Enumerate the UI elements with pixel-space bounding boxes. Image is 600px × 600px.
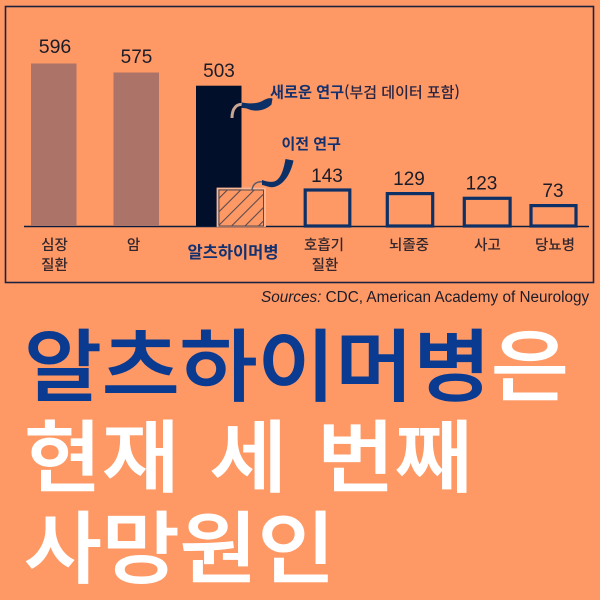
- bar: cancer: 575: [121, 47, 152, 68]
- bar: diabetes: [531, 181, 576, 226]
- category labels: 암: [127, 234, 140, 255]
- title line 3: 사망원인: [24, 486, 335, 600]
- category labels: 사고: [474, 234, 501, 255]
- bar: accidents: 123: [466, 174, 497, 194]
- bar: stroke: [387, 169, 433, 226]
- bar: diabetes: 73: [542, 181, 564, 202]
- label: Alzheimer's disease: 알츠하이머병: [187, 239, 279, 263]
- category labels: 질환: [312, 254, 338, 275]
- category labels: 심장: [41, 234, 68, 255]
- title line 2: 현재 세 번째: [24, 395, 473, 509]
- panel frame: [6, 6, 594, 282]
- bar: respiratory disease: 143: [311, 166, 343, 187]
- bar: cancer: [114, 47, 159, 226]
- source note: Sources: CDC, American Academy of Neurology: [261, 289, 590, 306]
- callout: new study: 새로운 연구(부검 데이터 포함): [270, 80, 460, 102]
- category labels: 질환: [41, 254, 68, 275]
- bar: accidents: [464, 174, 510, 226]
- bar: Alzheimer new study: [196, 61, 242, 226]
- category labels: 호흡기: [304, 234, 344, 255]
- callout: previous study: [252, 133, 341, 190]
- category labels: [41, 234, 575, 275]
- title line 1: 알츠하이머병은: [24, 304, 569, 418]
- category labels: 뇌졸중: [389, 234, 429, 255]
- bar: Alzheimer previous study: [218, 188, 265, 226]
- category labels: 당뇨병: [535, 234, 575, 255]
- bar: respiratory disease: [305, 166, 350, 226]
- bar: Alzheimer new study: 503: [203, 61, 235, 82]
- bar: heart disease: [31, 36, 76, 226]
- axis line: [24, 226, 589, 228]
- callout: previous study: 이전 연구: [282, 133, 341, 154]
- callout: new study: [232, 80, 460, 118]
- bar: heart disease: 596: [39, 36, 71, 58]
- bar: stroke: 129: [393, 169, 425, 190]
